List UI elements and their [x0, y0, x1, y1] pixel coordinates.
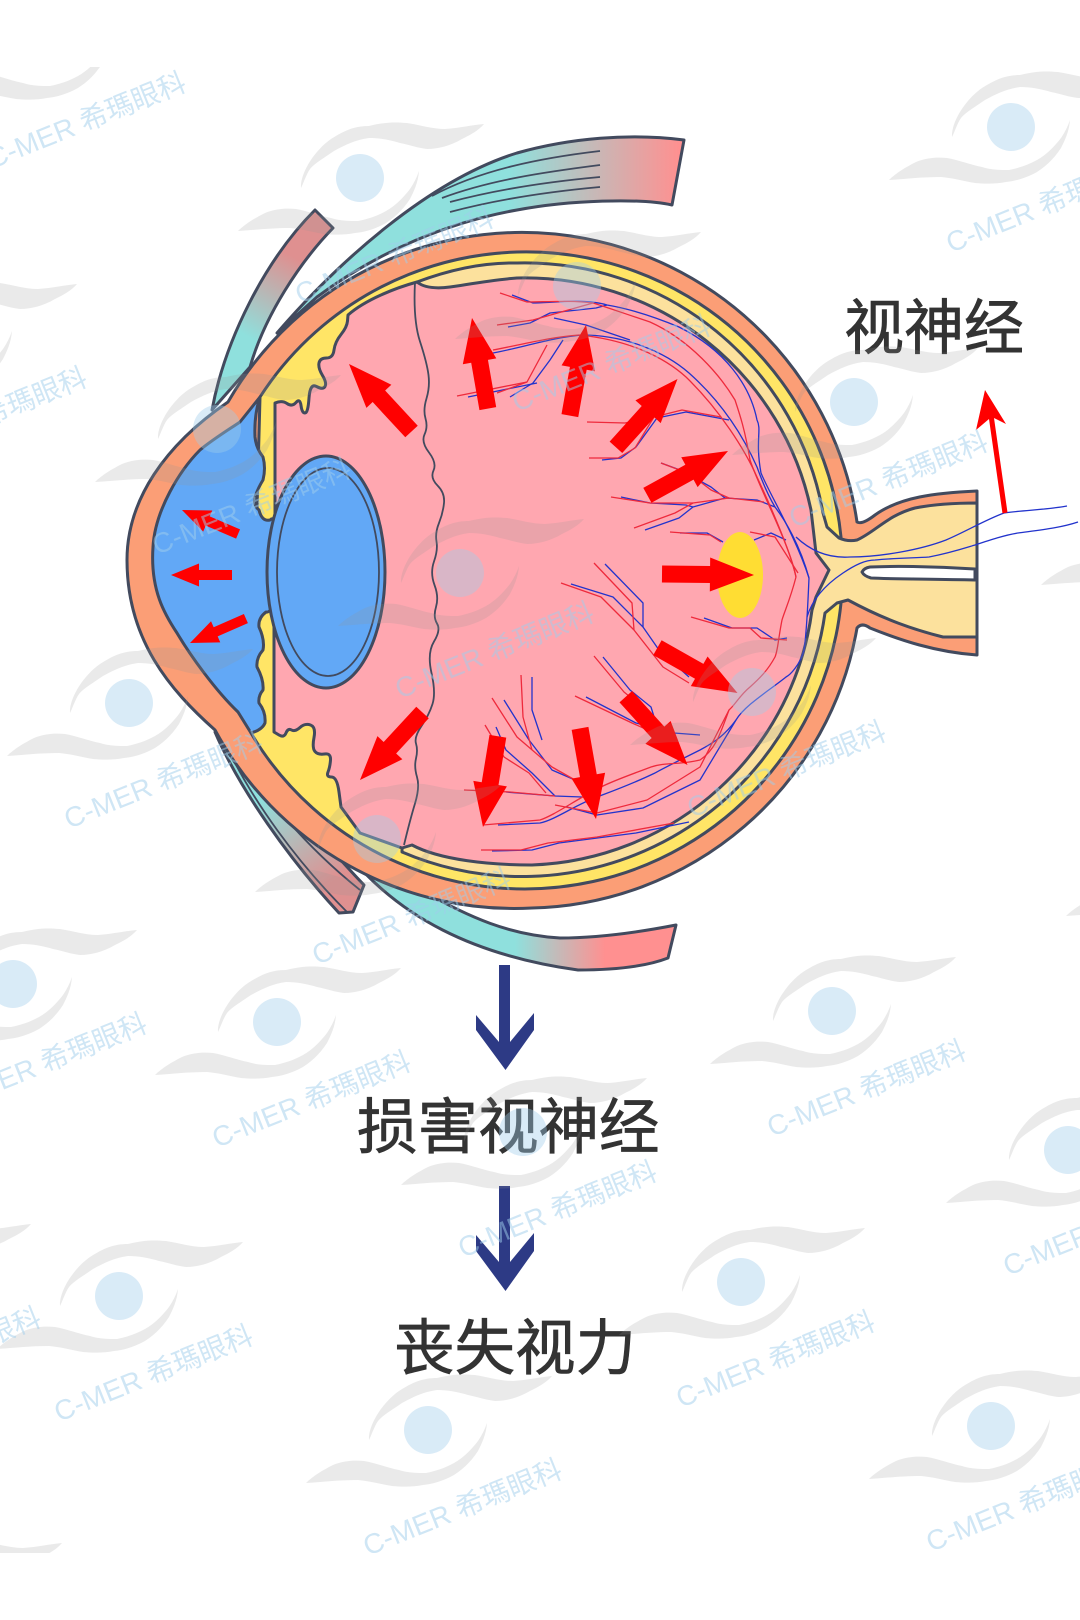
watermark pattern: C-MER 希瑪眼科 — [672, 1306, 879, 1414]
watermark pattern: C-MER 希瑪眼科 — [763, 1035, 970, 1143]
arrow: to vision loss — [476, 1186, 534, 1291]
watermark pattern: C-MER 希瑪眼科 — [359, 1454, 566, 1562]
optic nerve slit — [862, 566, 975, 580]
pressure arrows in vitreous — [337, 315, 754, 830]
optic nerve fibres — [796, 506, 1078, 617]
watermark pattern: C-MER 希瑪眼科 — [291, 202, 498, 310]
watermark pattern: C-MER 希瑪眼科 — [208, 1046, 415, 1154]
label: optic nerve: 视神经 — [844, 295, 1024, 362]
muscle: superior oblique — [212, 210, 333, 410]
arrow: optic nerve signal — [976, 390, 1008, 514]
aqueous humour — [153, 397, 276, 733]
watermark pattern: C-MER 希瑪眼科 — [785, 426, 992, 534]
retinal veins — [468, 295, 809, 851]
retinal arteries — [457, 293, 798, 850]
vitreous chamber — [274, 278, 829, 865]
arrow: to optic nerve damage — [476, 965, 534, 1070]
choroid yellow band — [251, 252, 841, 889]
muscle: superior rectus — [277, 137, 684, 333]
watermark pattern: C-MER 希瑪眼科 — [308, 863, 515, 971]
sclera, cornea and nerve sheath — [127, 232, 977, 908]
muscle: inferior rectus — [353, 860, 676, 970]
watermark pattern: C-MER 希瑪眼科 — [391, 597, 598, 705]
watermark pattern: C-MER 希瑪眼科 — [50, 1320, 257, 1428]
muscle: inferior oblique — [215, 732, 364, 913]
eye diagram — [127, 137, 1078, 970]
macula — [717, 532, 763, 618]
pressure arrows in anterior chamber — [171, 499, 251, 654]
retina band and optic nerve — [402, 263, 977, 876]
watermark pattern: C-MER 希瑪眼科 — [148, 453, 355, 561]
watermark pattern: C-MER 希瑪眼科 — [60, 727, 267, 835]
hyaloid membrane line — [404, 282, 444, 845]
text: optic nerve damage: 损害视神经 — [357, 1093, 660, 1161]
lens — [267, 456, 385, 688]
text: vision loss: 丧失视力 — [394, 1314, 636, 1382]
watermark pattern: C-MER 希瑪眼科 — [683, 716, 890, 824]
watermark pattern: C-MER 希瑪眼科 — [508, 310, 715, 418]
watermark pattern: C-MER 希瑪眼科 — [454, 1156, 661, 1264]
